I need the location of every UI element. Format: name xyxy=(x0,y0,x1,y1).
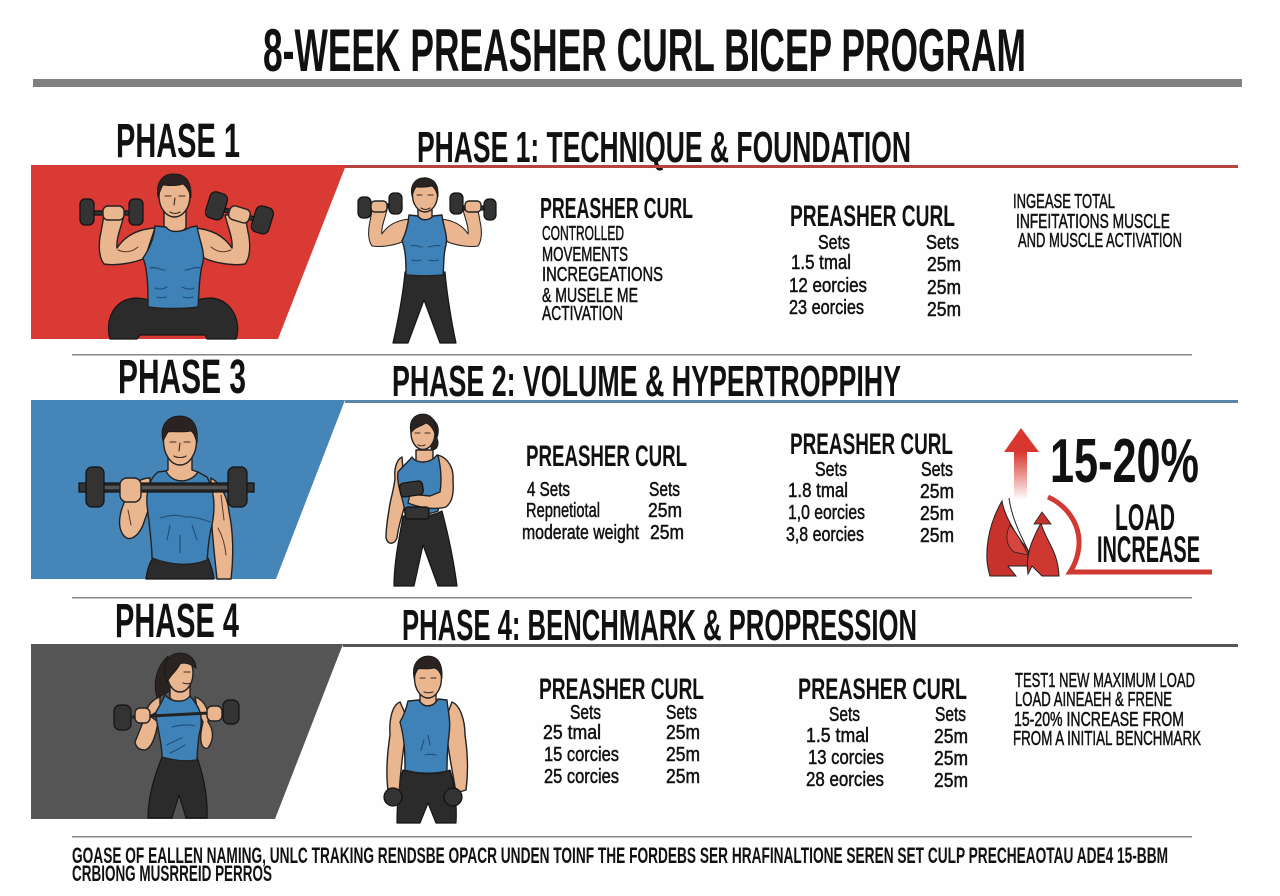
table: preasher curl progression: Sets xyxy=(829,704,860,726)
column: preasher curl volume: PREASHER CURL xyxy=(526,440,687,473)
table: preasher curl sets: 23 eorcies xyxy=(789,297,864,319)
table: preasher curl sets: Sets xyxy=(815,459,847,481)
footer text xyxy=(72,843,1168,886)
table: preasher curl sets xyxy=(786,428,954,547)
table: preasher curl sets: 1.8 tmal xyxy=(788,480,848,502)
column: preasher curl volume: 25m xyxy=(650,522,684,544)
table: preasher curl sets: 25m xyxy=(927,277,961,299)
table: preasher curl sets: 25m xyxy=(920,525,954,547)
table: preasher curl sets: 25m xyxy=(927,299,961,321)
figure: man with barbell xyxy=(79,416,254,579)
panel: phase 2 xyxy=(31,351,1238,586)
table: preasher curl progression: 25m xyxy=(934,748,968,770)
grey banner xyxy=(31,644,343,819)
table: preasher curl sets: 25m xyxy=(927,254,961,276)
table: preasher curl sets xyxy=(789,200,961,321)
table: preasher curl sets: 1.5 tmal xyxy=(791,252,851,274)
table: preasher curl benchmark: PREASHER CURL xyxy=(539,673,704,706)
red banner xyxy=(31,165,346,339)
footer text: CRBIONG MUSRREID PERROS xyxy=(72,861,272,886)
icon: bicep muscle xyxy=(987,498,1059,576)
phase 4 heading: PHASE 4: BENCHMARK & PROPRESSION xyxy=(402,601,917,650)
column: preasher curl notes: & MUSELE ME xyxy=(542,285,638,307)
panel: phase 4 xyxy=(31,595,1238,823)
table: preasher curl sets: 12 eorcies xyxy=(789,275,867,297)
table: preasher curl sets: 3,8 eorcies xyxy=(786,524,864,546)
note: test new maximum: LOAD AINEAEH & FRENE xyxy=(1015,689,1172,711)
icon: rising arrow xyxy=(1004,428,1039,500)
table: preasher curl benchmark: 25m xyxy=(666,744,700,766)
table: preasher curl progression: 25m xyxy=(934,770,968,792)
table: preasher curl progression: 25m xyxy=(934,726,968,748)
phase 2 heading: PHASE 2: VOLUME & HYPERTROPPIHY xyxy=(392,357,901,406)
figure: standing man with dumbbells xyxy=(358,178,496,343)
figure: woman with dumbbell xyxy=(386,414,457,586)
note: test new maximum xyxy=(1013,670,1201,750)
blue banner xyxy=(31,400,345,579)
panel: phase 1 xyxy=(31,115,1238,343)
phase 4 label: PHASE 4 xyxy=(115,595,239,648)
note: muscle activation: INFEITATIONS MUSCLE xyxy=(1016,211,1170,233)
figure: seated man with dumbbells xyxy=(80,174,275,339)
column: preasher curl volume xyxy=(522,440,687,544)
phase 1 label: PHASE 1 xyxy=(116,115,240,168)
column: preasher curl volume: 25m xyxy=(648,500,682,522)
table: preasher curl progression: 13 corcies xyxy=(808,747,884,769)
label: load increase: LOAD xyxy=(1115,497,1175,538)
column: preasher curl notes: ACTIVATION xyxy=(542,303,623,325)
column: preasher curl volume: moderate weight xyxy=(522,522,639,544)
table: preasher curl progression xyxy=(798,673,968,792)
figure: woman with barbell xyxy=(114,653,239,818)
stat: 15-20%: 15-20% xyxy=(1050,427,1199,496)
table: preasher curl sets: PREASHER CURL xyxy=(790,200,955,233)
note: test new maximum: 15-20% INCREASE FROM xyxy=(1014,709,1184,731)
table: preasher curl sets: Sets xyxy=(926,232,959,254)
table: preasher curl benchmark xyxy=(539,673,704,788)
table: preasher curl benchmark: 25 corcies xyxy=(544,766,619,788)
column: preasher curl volume: 4 Sets xyxy=(527,479,570,501)
phase 1 heading: PHASE 1: TECHNIQUE & FOUNDATION xyxy=(417,123,911,172)
note: muscle activation: INGEASE TOTAL xyxy=(1013,191,1115,213)
table: preasher curl progression: 1.5 tmal xyxy=(806,725,869,747)
column: preasher curl notes xyxy=(540,193,693,325)
table: preasher curl sets: 25m xyxy=(920,503,954,525)
table: preasher curl progression: PREASHER CURL xyxy=(798,673,967,706)
column: preasher curl notes: PREASHER CURL xyxy=(540,193,693,225)
table: preasher curl benchmark: 15 corcies xyxy=(544,744,619,766)
table: preasher curl sets: PREASHER CURL xyxy=(790,428,953,461)
column: preasher curl notes: CONTROLLED xyxy=(542,223,624,245)
table: preasher curl benchmark: Sets xyxy=(570,702,601,724)
note: muscle activation xyxy=(1013,191,1182,252)
table: preasher curl sets: Sets xyxy=(921,459,953,481)
table: preasher curl progression: Sets xyxy=(935,704,966,726)
column: preasher curl notes: MOVEMENTS xyxy=(542,244,628,266)
label: load increase xyxy=(1097,497,1200,570)
table: preasher curl benchmark: 25m xyxy=(666,722,700,744)
table: preasher curl sets: 25m xyxy=(920,481,954,503)
table: preasher curl sets: Sets xyxy=(818,232,850,254)
table: preasher curl benchmark: Sets xyxy=(666,702,697,724)
column: preasher curl volume: Sets xyxy=(649,479,680,501)
icon: red bracket curve xyxy=(1048,497,1212,572)
table: preasher curl sets: 1,0 eorcies xyxy=(788,502,865,524)
table: preasher curl benchmark: 25m xyxy=(666,766,700,788)
column: preasher curl notes: INCREGEATIONS xyxy=(542,264,663,286)
note: muscle activation: AND MUSCLE ACTIVATION xyxy=(1018,230,1182,252)
table: preasher curl benchmark: 25 tmal xyxy=(543,722,601,744)
column: preasher curl volume: Repnetiotal xyxy=(526,500,600,522)
phase 3 label: PHASE 3 xyxy=(118,351,246,404)
callout: load increase xyxy=(987,427,1212,576)
table: preasher curl progression: 28 eorcies xyxy=(806,769,884,791)
figure: standing man with dumbbells at sides xyxy=(384,656,467,823)
